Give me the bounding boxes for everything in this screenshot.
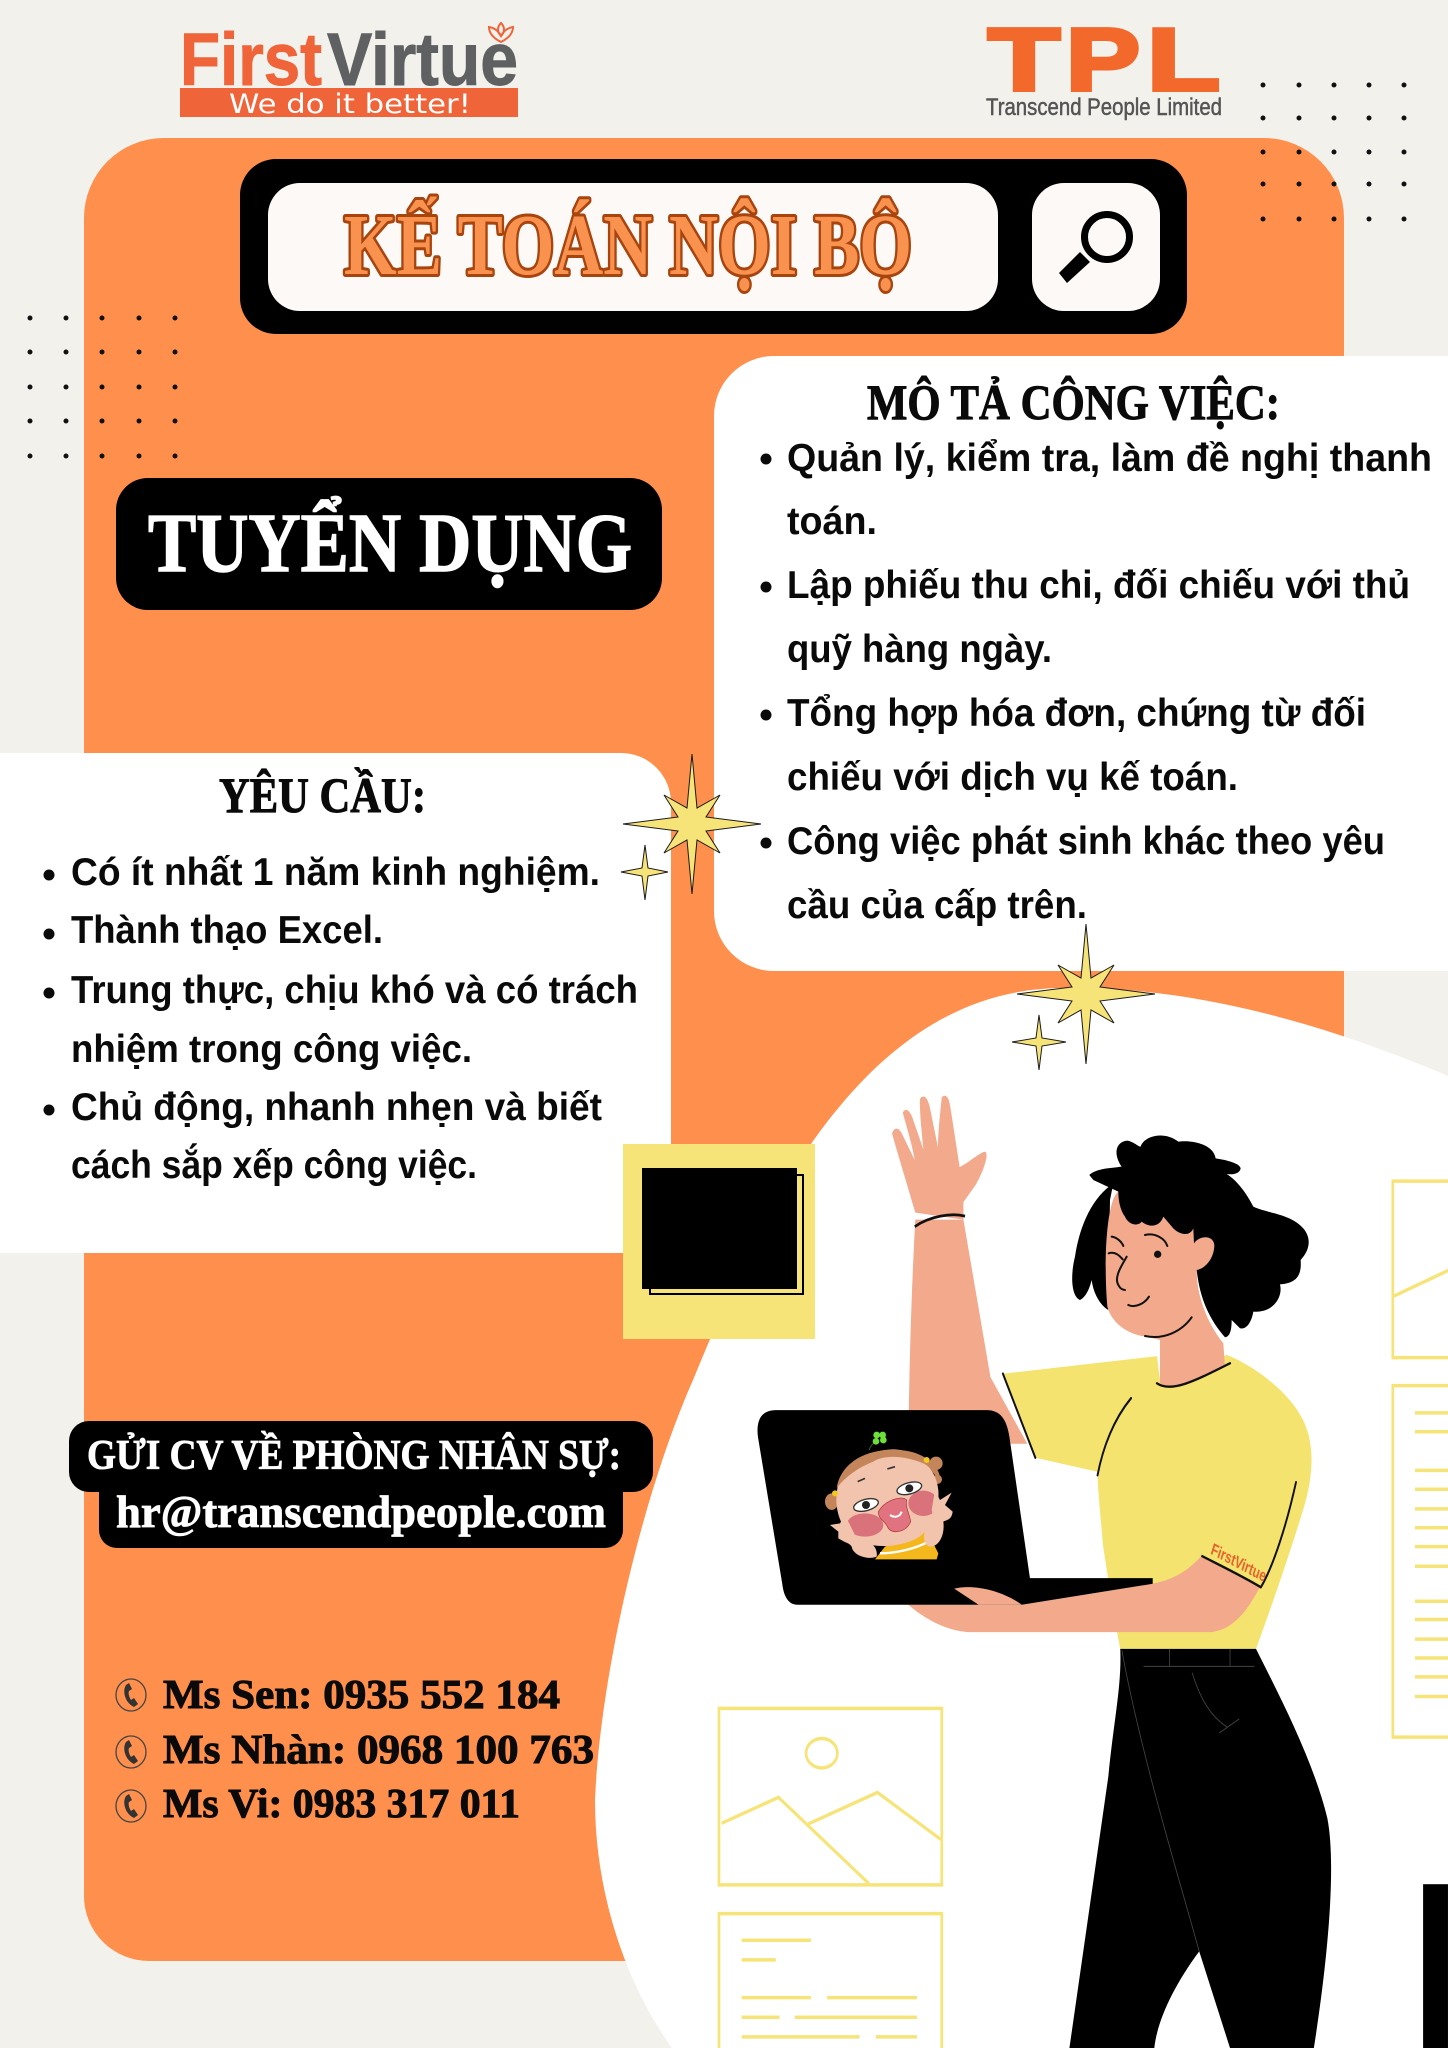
- dot grid: left: [28, 316, 178, 458]
- person: shirt lines: [1003, 1374, 1296, 1587]
- illustration: frames and person body: [719, 1096, 1448, 2048]
- logo company name: Transcend People Limited: [986, 94, 1222, 121]
- logo letters TPL: L: [1147, 10, 1220, 109]
- requirements list: Chủ động, nhanh nhẹn và biết: [71, 1086, 602, 1129]
- logo letters TPL: [988, 10, 1220, 109]
- sticker face: [836, 1449, 938, 1546]
- heading: requirements: YÊU CẦU:: [219, 766, 426, 823]
- icon: magnifier: [1059, 214, 1130, 283]
- person: sleeve cuff: [1201, 1556, 1261, 1587]
- requirements list: cách sắp xếp công việc.: [71, 1143, 477, 1187]
- job description list: chiếu với dịch vụ kế toán.: [787, 756, 1238, 799]
- icon: phone: [116, 1790, 146, 1822]
- panel: orange background: [84, 138, 1344, 1961]
- logo tagline bar: [180, 88, 518, 117]
- shirt collar: [1157, 1363, 1230, 1387]
- face details: [1109, 1234, 1192, 1337]
- sticker pigtails: [825, 1457, 943, 1510]
- job description list: toán.: [787, 500, 877, 543]
- job description list: [760, 437, 1432, 927]
- sticker eyes: [852, 1480, 923, 1514]
- star cluster: lower: [1012, 924, 1155, 1070]
- logo: First Virtue: [180, 18, 518, 120]
- person: raised arm: [908, 1220, 1027, 1444]
- logo wordmark First: First: [180, 18, 322, 101]
- laptop sticker: baby: [825, 1432, 953, 1559]
- icon: phone: [116, 1679, 146, 1711]
- sticker shirt: [875, 1530, 938, 1559]
- sticker brows: [858, 1467, 895, 1482]
- icon: lotus: [489, 23, 513, 42]
- wireframe: image placeholder: [719, 1708, 942, 1885]
- requirements list: Có ít nhất 1 năm kinh nghiệm.: [71, 851, 600, 894]
- hair front: [1089, 1135, 1309, 1337]
- contact list: [116, 1671, 594, 1826]
- yellow photo frame: [623, 1144, 815, 1339]
- person: head: [1072, 1135, 1309, 1387]
- star cluster: middle: [621, 754, 761, 900]
- search input: [268, 183, 998, 311]
- requirements list: Trung thực, chịu khó và có trách: [71, 969, 638, 1012]
- callout line 1: GỬI CV VỀ PHÒNG NHÂN SỰ:: [87, 1431, 621, 1479]
- job description list: Lập phiếu thu chi, đối chiếu với thủ: [787, 564, 1410, 607]
- sleeve logo: FirstVirtue: [1209, 1540, 1268, 1586]
- person: hand: [892, 1096, 987, 1220]
- callout: send CV: [69, 1421, 653, 1548]
- job description list: Công việc phát sinh khác theo yêu: [787, 820, 1385, 863]
- dot grid: top right: [1260, 82, 1406, 222]
- wireframe: text block: [719, 1914, 942, 2048]
- face and neck: [1106, 1192, 1225, 1387]
- hair back: [1072, 1183, 1113, 1310]
- heading: job description: MÔ TẢ CÔNG VIỆC:: [867, 374, 1280, 430]
- panel: requirements: [0, 753, 671, 1253]
- job title: KẾ TOÁN NỘI BỘ: [344, 196, 912, 293]
- contact: Ms Vi: Ms Vi: 0983 317 011: [163, 1780, 520, 1826]
- sticker hands: [830, 1490, 953, 1558]
- wireframe: right image: [1393, 1181, 1448, 1358]
- sticker blush: [847, 1513, 883, 1537]
- job description list: Quản lý, kiểm tra, làm đề nghị thanh: [787, 437, 1432, 480]
- logo wordmark Virtue: Virtue: [327, 18, 518, 101]
- search bar: [240, 159, 1187, 334]
- person: forearm: [908, 1556, 1261, 1632]
- badge: tuyển dụng: [116, 478, 662, 610]
- logo tagline: We do it better!: [229, 89, 471, 120]
- laptop: [758, 1410, 1153, 1605]
- search button: [1032, 183, 1160, 311]
- requirements list: Thành thạo Excel.: [71, 909, 383, 952]
- sticker hair bands: [832, 1490, 838, 1496]
- panel: job description: [714, 356, 1448, 971]
- badge text: TUYỂN DỤNG: [148, 495, 632, 590]
- sticker hair: [837, 1450, 940, 1488]
- wireframe: right text block: [1393, 1386, 1448, 1737]
- requirements list: [44, 851, 638, 1187]
- person: thumb: [954, 1587, 1022, 1605]
- person: shirt: [1003, 1355, 1312, 1649]
- icon: phone: [116, 1736, 146, 1768]
- job description list: Tổng hợp hóa đơn, chứng từ đối: [787, 692, 1366, 735]
- requirements list: nhiệm trong công việc.: [71, 1028, 472, 1071]
- sticker clover: [869, 1432, 887, 1450]
- black block bottom right: [1423, 1884, 1448, 2048]
- white blob backdrop: [595, 988, 1448, 2048]
- pants seams: [1122, 1649, 1254, 1951]
- person body: [892, 1096, 1331, 2048]
- person: pants: [1069, 1649, 1331, 2048]
- sticker mouth: [878, 1498, 911, 1532]
- logo: TPL: [986, 10, 1222, 121]
- contact: Ms Nhàn: Ms Nhàn: 0968 100 763: [163, 1726, 594, 1772]
- callout email: hr@transcendpeople.com: [116, 1486, 606, 1537]
- person: bracelet: [915, 1215, 965, 1227]
- contact: Ms Sen: Ms Sen: 0935 552 184: [163, 1671, 560, 1717]
- logo letters TPL: T: [988, 10, 1060, 109]
- job description list: quỹ hàng ngày.: [787, 628, 1052, 671]
- logo letters TPL: P: [1066, 10, 1140, 109]
- job description list: cầu của cấp trên.: [787, 884, 1087, 927]
- ear: [1194, 1237, 1214, 1270]
